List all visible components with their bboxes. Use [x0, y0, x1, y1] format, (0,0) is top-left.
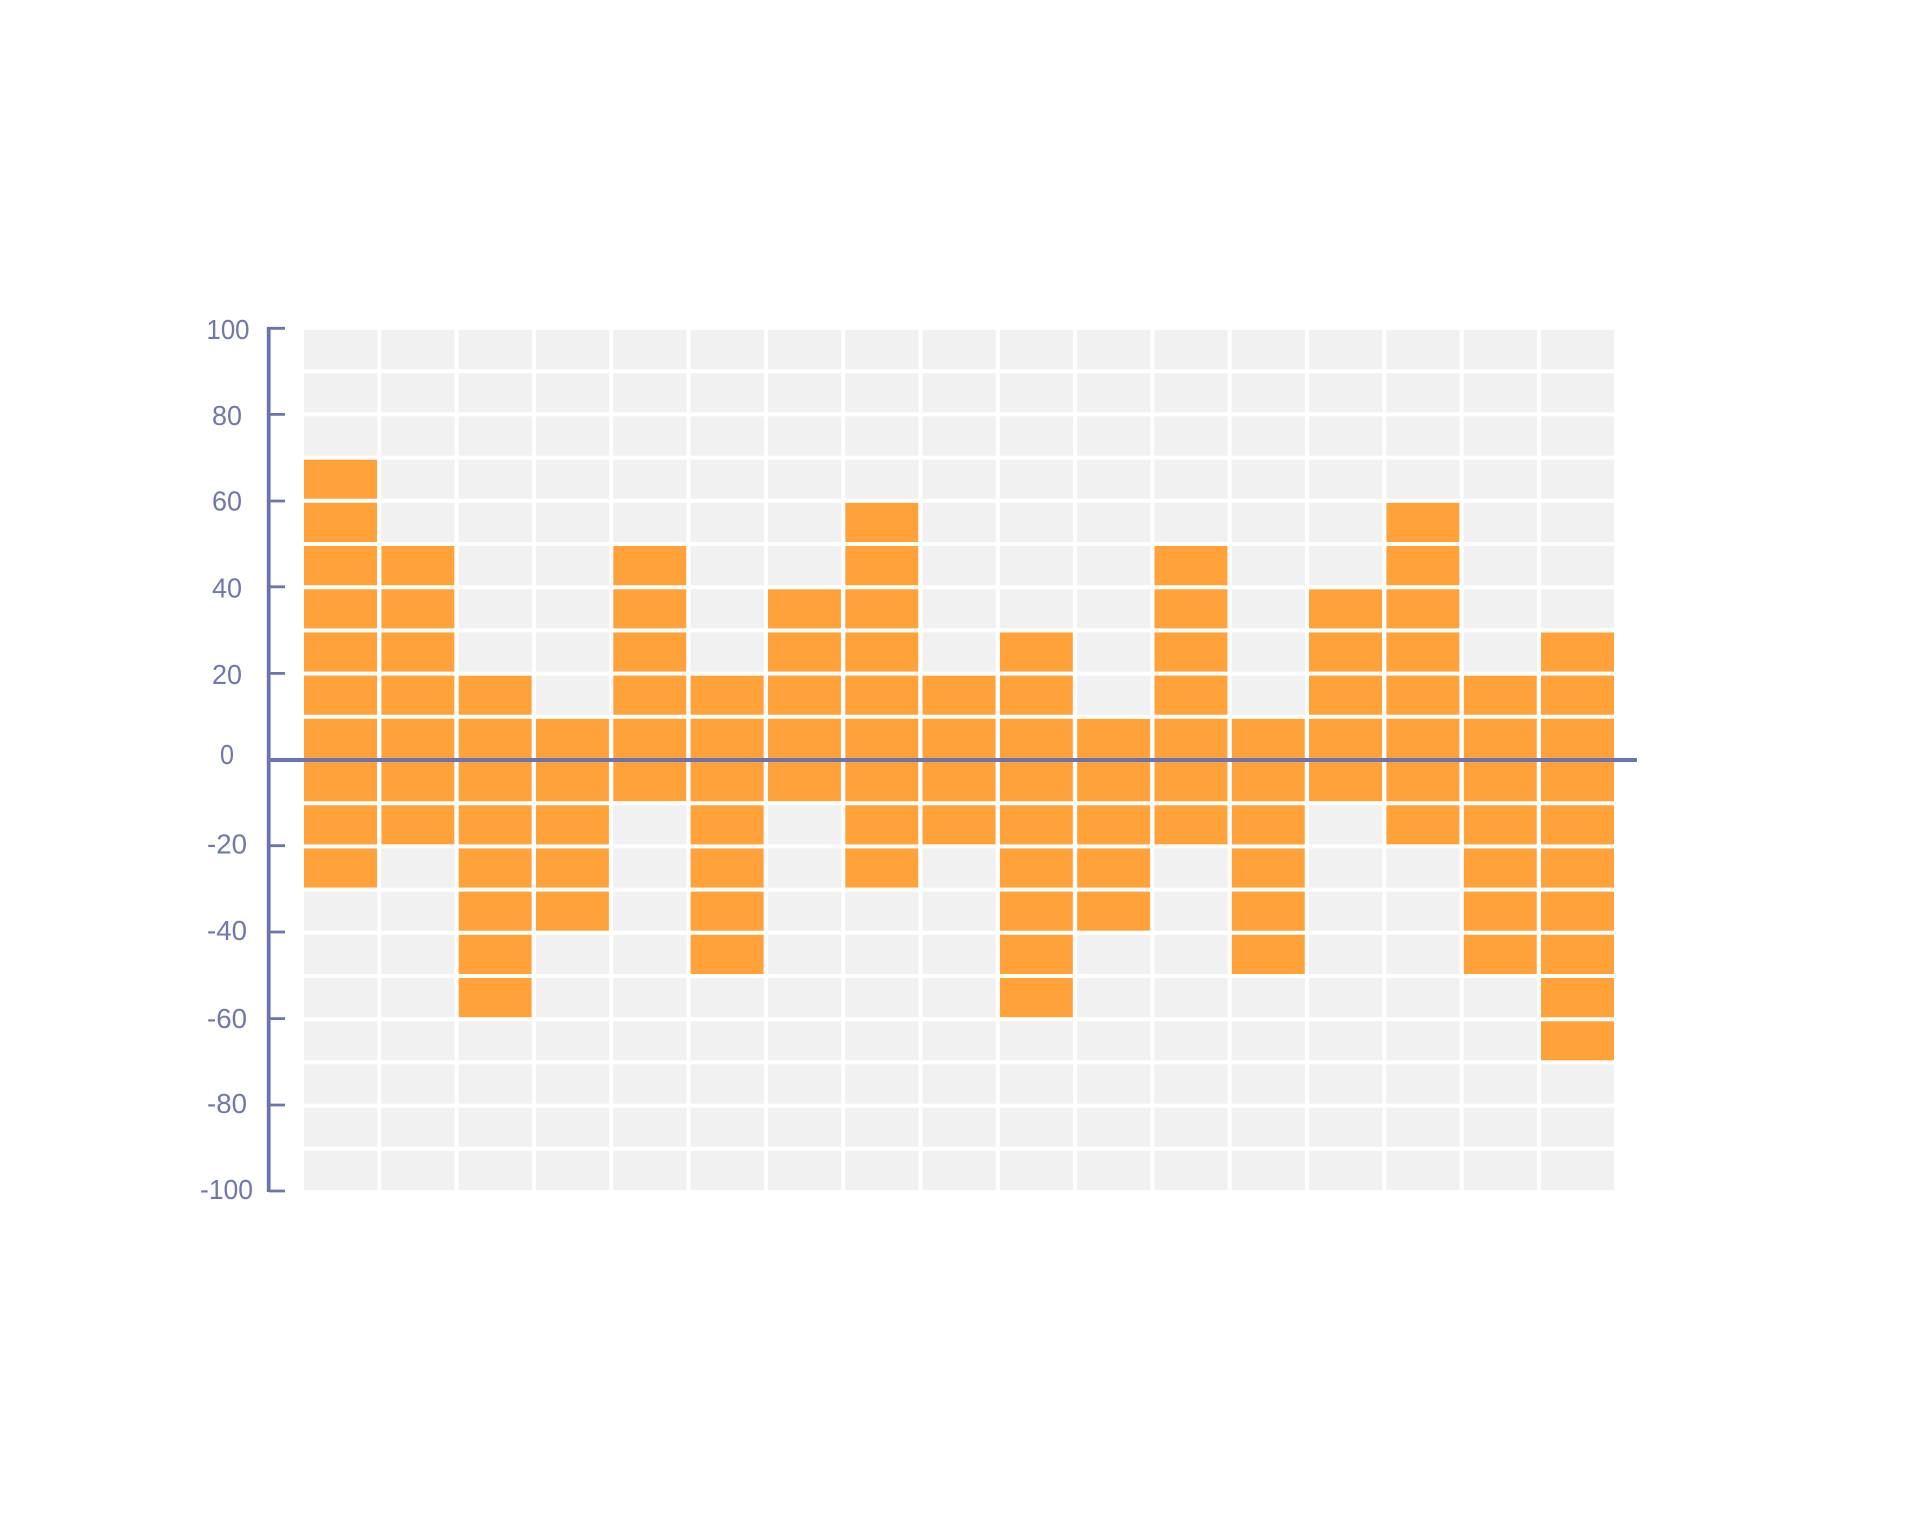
bar 4: +10 / -40: [536, 719, 609, 931]
y axis labels: 40: [212, 572, 242, 604]
y axis labels: [200, 314, 253, 1205]
bar 1: +70 / -30: [304, 460, 377, 888]
bar 8: +60 / -30: [845, 503, 918, 888]
bar 5: +50 / -10: [613, 546, 686, 801]
y axis labels: 100: [206, 314, 250, 345]
bar 3: +20 / -60: [459, 676, 532, 1017]
zero baseline: [268, 758, 1637, 762]
y axis labels: -40: [207, 915, 247, 946]
bar 14: +40 / -10: [1309, 589, 1382, 801]
bar 12: +50 / -20: [1154, 546, 1227, 844]
bar 9: +20 / -20: [922, 676, 996, 844]
y axis labels: -100: [200, 1174, 253, 1205]
y axis labels: 0: [220, 739, 234, 770]
bar 2: +50 / -20: [381, 546, 454, 844]
bar 7: +40 / -10: [768, 589, 841, 801]
bar 13: +10 / -50: [1232, 719, 1305, 974]
bars: [304, 460, 1614, 1060]
y axis labels: -60: [207, 1003, 247, 1034]
y axis with ticks: [269, 327, 285, 1192]
y axis labels: -80: [207, 1088, 247, 1119]
y axis labels: 60: [212, 486, 242, 516]
bar 10: +30 / -60: [1000, 632, 1073, 1017]
bar 16: +20 / -50: [1464, 676, 1537, 974]
y axis labels: -20: [207, 828, 247, 860]
plot background grid: [304, 330, 1614, 1190]
y axis labels: 80: [212, 400, 242, 431]
bar 6: +20 / -50: [691, 676, 764, 974]
bar 17: +30 / -70: [1541, 632, 1614, 1060]
bar 11: +10 / -40: [1077, 719, 1150, 931]
bar 15: +60 / -20: [1386, 503, 1459, 844]
y axis labels: 20: [212, 659, 242, 690]
